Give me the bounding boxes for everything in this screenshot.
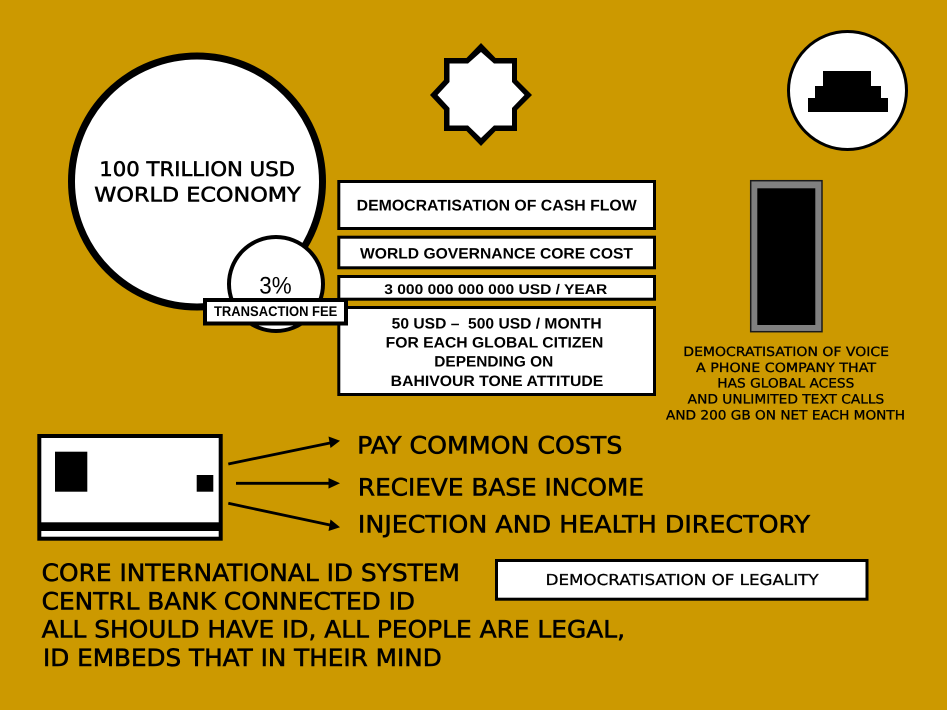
arrow: to injection and health directory — [228, 503, 340, 531]
box: democratisation of legality: DEMOCRATISATION OF LEGALITY — [546, 571, 820, 589]
box: monthly income: BAHIVOUR TONE ATTITUDE — [391, 373, 603, 390]
box: democratisation of cash flow: DEMOCRATISATION OF CASH FLOW — [357, 198, 637, 215]
panel: world economy circles — [72, 56, 323, 331]
label: transaction fee: TRANSACTION FEE — [214, 303, 337, 319]
big circle: world economy: 100 TRILLION USD — [99, 157, 295, 181]
text: democratisation of voice: DEMOCRATISATION OF VOICE — [683, 345, 889, 360]
box: world governance core cost: WORLD GOVERNANCE CORE COST — [360, 245, 633, 262]
big circle: world economy — [72, 56, 322, 307]
text: democratisation of voice: A PHONE COMPANY THAT — [696, 361, 876, 376]
icon: ID card — [39, 436, 221, 539]
text: core international ID system: ALL SHOULD HAVE ID, ALL PEOPLE ARE LEGAL, — [42, 616, 625, 644]
box: world governance core cost — [339, 237, 654, 268]
box: yearly cost — [339, 276, 654, 299]
arrow: to receive base income — [236, 478, 340, 489]
box: yearly cost: 3 000 000 000 000 USD / YEAR — [384, 281, 607, 297]
icon: eight-pointed star — [430, 43, 532, 146]
arrow: to pay common costs — [228, 436, 340, 464]
text: democratisation of voice — [666, 345, 905, 423]
box: democratisation of cash flow — [339, 182, 654, 228]
text: core international ID system: CORE INTERNATIONAL ID SYSTEM — [42, 559, 460, 587]
text: core international ID system: ID EMBEDS THAT IN THEIR MIND — [43, 644, 442, 672]
text: pay common costs: PAY COMMON COSTS — [357, 431, 622, 459]
text: democratisation of voice: AND UNLIMITED TEXT CALLS — [688, 392, 884, 407]
small circle: 3% — [229, 237, 323, 331]
text: democratisation of voice: AND 200 GB ON NET EACH MONTH — [666, 408, 905, 423]
label: transaction fee — [205, 300, 346, 324]
text: core international ID system — [42, 559, 625, 672]
icon: phone — [751, 181, 822, 332]
icon: podium in circle — [788, 32, 906, 150]
text: democratisation of voice: HAS GLOBAL ACESS — [717, 377, 854, 392]
box: monthly income: DEPENDING ON — [434, 354, 553, 371]
box: monthly income: FOR EACH GLOBAL CITIZEN — [386, 335, 603, 352]
box: monthly income: 50 USD – 500 USD / MONTH — [392, 316, 602, 333]
text: core international ID system: CENTRL BANK CONNECTED ID — [42, 588, 415, 616]
box: monthly income — [339, 308, 654, 394]
big circle: world economy: WORLD ECONOMY — [94, 183, 302, 207]
small circle: 3%: 3% — [259, 272, 292, 299]
box: democratisation of legality — [496, 560, 867, 599]
text: recieve base income: RECIEVE BASE INCOME — [358, 474, 644, 502]
text: injection and health directory: INJECTION AND HEALTH DIRECTORY — [358, 510, 810, 538]
